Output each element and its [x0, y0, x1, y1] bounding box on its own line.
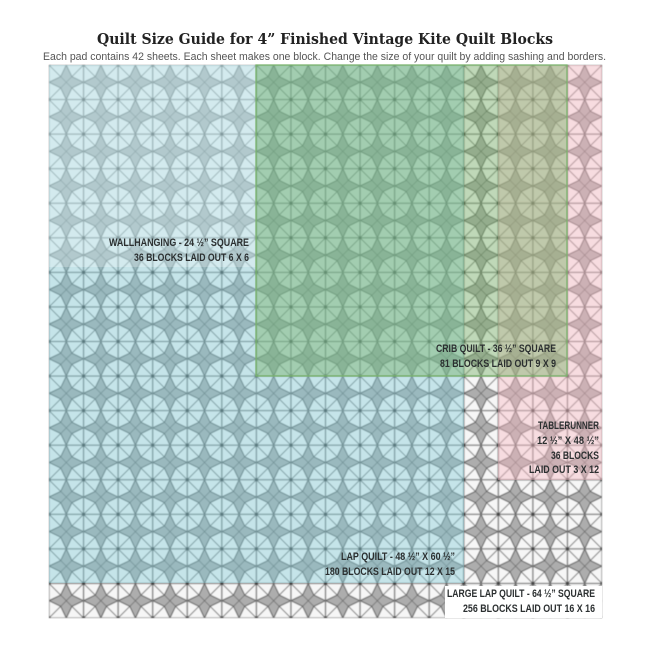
label: large lap quilt: 256 BLOCKS LAID OUT 16 X 16: [463, 603, 595, 615]
panel: crib quilt overlay: [256, 65, 567, 376]
label: crib quilt: 81 BLOCKS LAID OUT 9 X 9: [440, 358, 556, 370]
label: lap quilt: 180 BLOCKS LAID OUT 12 X 15: [325, 566, 455, 578]
panel: lap quilt overlay: [49, 65, 464, 583]
label: tablerunner: TABLERUNNER: [538, 420, 599, 432]
panel: wallhanging overlay: [49, 65, 256, 267]
label: tablerunner: 12 ½” X 48 ½”: [537, 435, 599, 447]
panel: quilt size chart: [49, 65, 602, 618]
label: wallhanging: WALLHANGING - 24 ½” SQUARE: [109, 237, 249, 249]
label: tablerunner: 36 BLOCKS: [551, 450, 599, 462]
label: tablerunner: [529, 420, 599, 476]
label: lap quilt: LAP QUILT - 48 ½” X 60 ½”: [341, 551, 455, 563]
white label box for large lap quilt: [445, 586, 602, 618]
large lap quilt base pattern: [49, 65, 602, 618]
label: wallhanging: [109, 237, 249, 264]
label: crib quilt: CRIB QUILT - 36 ½” SQUARE: [436, 343, 556, 355]
label: large lap quilt: LARGE LAP QUILT - 64 ½” SQUARE: [447, 588, 595, 600]
subtitle: Each pad contains 42 sheets. Each sheet makes one block. Change the size of your quilt by adding sashing and borders.: [43, 51, 606, 63]
panel: tablerunner overlay: [498, 65, 602, 480]
label: wallhanging: 36 BLOCKS LAID OUT 6 X 6: [134, 252, 249, 264]
title: Quilt Size Guide for 4” Finished Vintage Kite Quilt Blocks: [97, 31, 553, 48]
label: crib quilt: [436, 343, 556, 370]
label: lap quilt: [325, 551, 455, 578]
label: large lap quilt: [447, 588, 595, 615]
label: tablerunner: LAID OUT 3 X 12: [529, 464, 599, 476]
